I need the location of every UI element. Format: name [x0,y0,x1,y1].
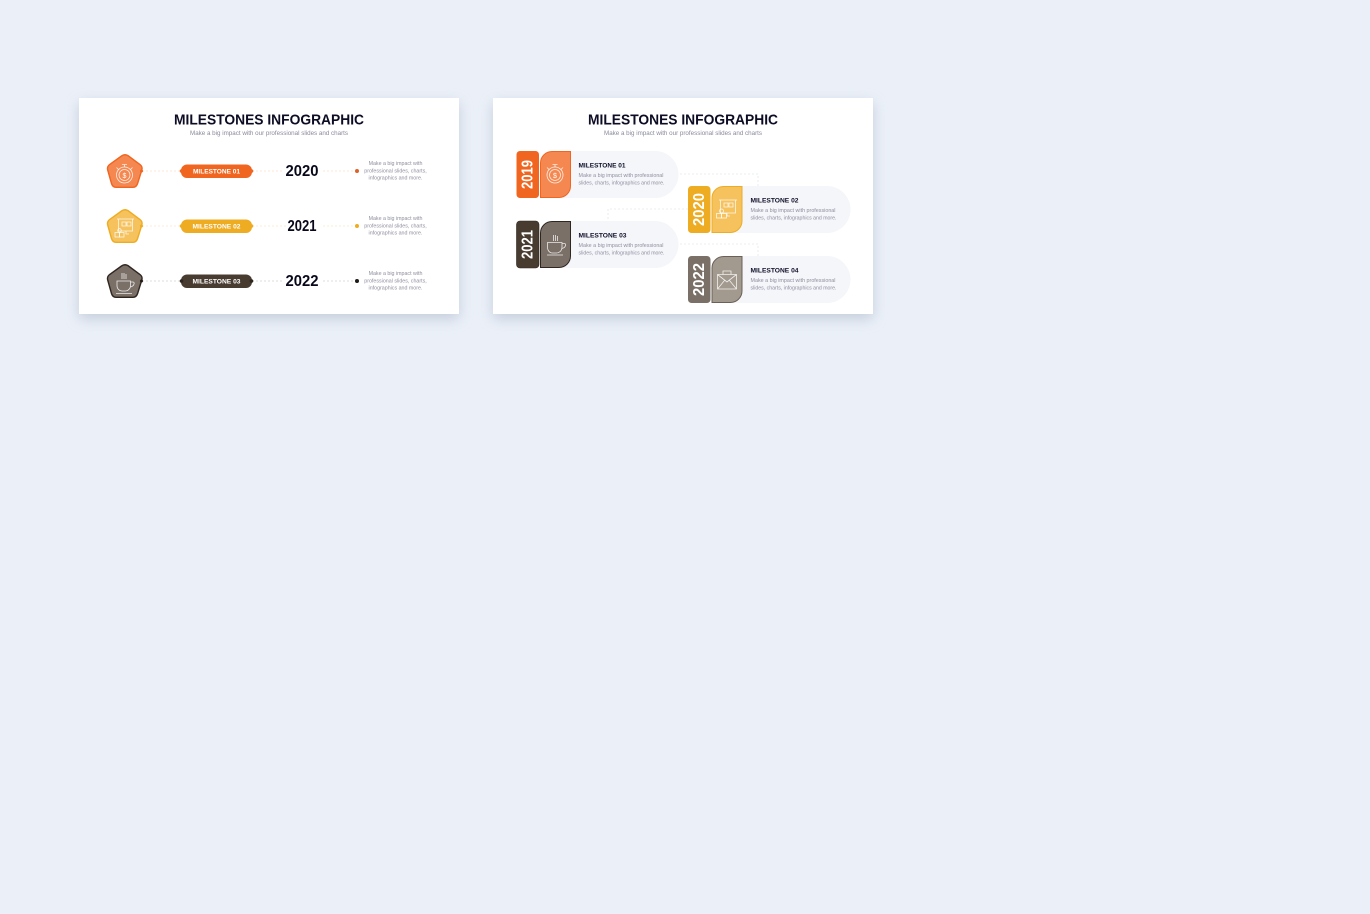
card: 2019 milestone 01: 2019 [520,160,536,189]
card: 2021 milestone 03: 2021 [520,230,536,259]
icon: presentation [712,186,742,232]
card: 2019 milestone 01 [516,151,678,198]
text: slides, charts, infographics and more. [750,215,836,221]
text: Make a big impact with professional [750,278,836,284]
card: 2020 milestone 02: 2020 [691,193,708,226]
milestone chip 1 [180,164,253,178]
icon: stopwatch pentagon: $ [123,173,127,180]
description 3: Make a big impact with [369,271,422,277]
icon: presentation pentagon [107,210,143,242]
text: slides, charts, infographics and more. [578,250,664,256]
year 2021: 2021 [288,218,317,235]
card: 2021 milestone 03 [516,221,678,268]
year tab [516,221,539,268]
icon: stopwatch pentagon [107,155,143,187]
year tab [688,256,710,303]
heading: MILESTONE 03 [578,232,627,240]
year tab [516,151,539,198]
icon: coffee cup [540,222,570,268]
heading: MILESTONE 01 [578,162,626,170]
milestone chip 2 [180,220,253,233]
milestone chip 3 [180,274,253,288]
description 3: professional slides, charts, [364,278,427,284]
subtitle: Make a big impact with our professional slides and charts [604,130,762,137]
year 2022: 2022 [286,273,319,290]
milestone chip 3: MILESTONE 03 [192,278,241,285]
milestone row 3 [107,265,427,297]
dot [355,279,359,283]
card: 2022 milestone 04 [688,256,850,303]
description 1: Make a big impact with [369,161,422,167]
heading: MILESTONE 02 [750,198,799,204]
milestone chip 1: MILESTONE 01 [193,168,240,175]
panel: left slide [79,98,459,314]
title: MILESTONES INFOGRAPHIC [174,112,364,128]
subtitle: Make a big impact with our professional slides and charts [190,130,348,137]
milestone row 2 [107,210,427,242]
connectors [608,174,758,256]
panel: right slide [493,98,873,314]
text: slides, charts, infographics and more. [750,285,836,291]
icon: stopwatch [540,152,570,198]
description 1: professional slides, charts, [364,168,427,174]
icon: briefcase [712,256,742,302]
year 2020: 2020 [286,163,319,180]
text: Make a big impact with professional [578,243,664,249]
year tab [688,186,710,233]
heading: MILESTONE 04 [750,268,799,274]
milestone chip 2: MILESTONE 02 [192,223,241,230]
description 2: infographics and more. [369,230,422,236]
card: 2022 milestone 04: 2022 [691,263,708,296]
description 2: professional slides, charts, [364,223,427,229]
description 3: infographics and more. [369,286,422,292]
icon: coffee cup pentagon [107,265,143,297]
text: slides, charts, infographics and more. [578,180,664,186]
text: Make a big impact with professional [750,208,836,214]
milestone row 1 [107,155,427,187]
text: Make a big impact with professional [578,173,664,179]
description 2: Make a big impact with [369,216,422,222]
dot [355,224,359,228]
title: MILESTONES INFOGRAPHIC [588,112,778,128]
icon: stopwatch: $ [553,173,557,180]
description 1: infographics and more. [369,176,422,182]
card: 2020 milestone 02 [688,186,850,233]
dot [355,169,359,173]
